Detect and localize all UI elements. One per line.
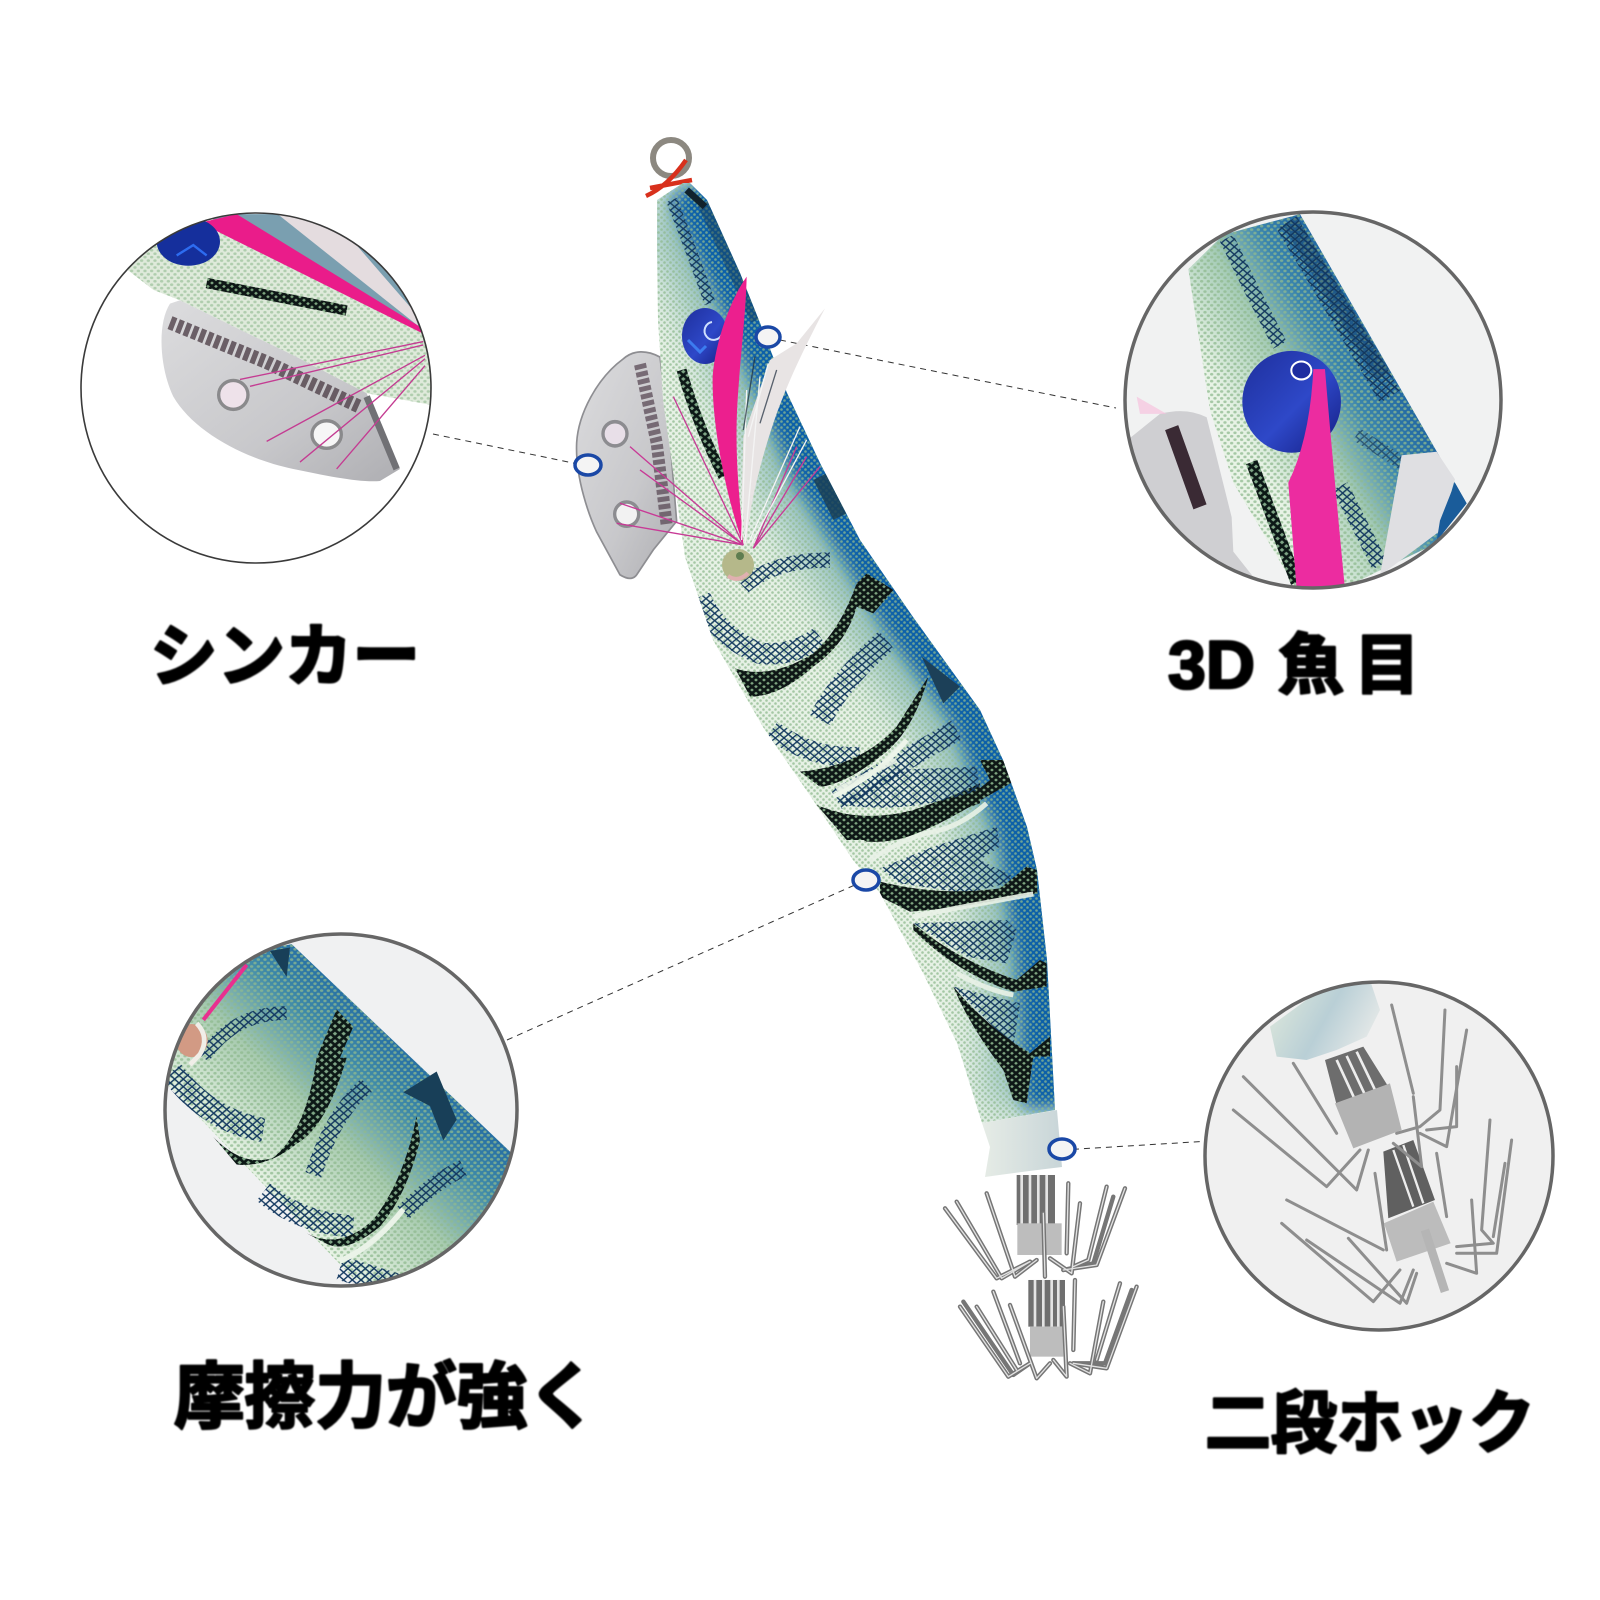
heading: strong friction: 摩擦力が強く — [174, 1358, 598, 1438]
panel: double hook detail — [1205, 980, 1553, 1330]
scale bands: rear body — [800, 760, 1050, 1103]
sinker weight — [577, 352, 677, 578]
panel: 3D eye detail — [1120, 212, 1501, 593]
marker dots — [575, 327, 1075, 1159]
upper hook tines — [945, 1183, 1125, 1278]
hook stems — [1017, 1175, 1065, 1357]
heading: 3D fish eye: 目 — [1354, 628, 1420, 702]
panel: sinker detail — [81, 211, 433, 563]
lure body fabric — [657, 183, 1055, 1123]
heading: 3D fish eye: 魚 — [1278, 628, 1344, 702]
bead — [722, 549, 754, 581]
heading: 3D fish eye: 3D — [1168, 627, 1255, 703]
3D eye — [682, 308, 728, 364]
leader lines — [433, 340, 1210, 1150]
scale bands: front body — [700, 560, 980, 840]
icon: towing eye ring — [646, 140, 692, 196]
main lure: squid jig — [577, 140, 1137, 1378]
lower hook tines — [960, 1280, 1137, 1378]
heading: double hook: 二段ホック — [1205, 1386, 1535, 1462]
feathers and threads — [617, 277, 825, 548]
heading: sinker: シンカー — [150, 619, 420, 695]
collar band — [982, 1110, 1062, 1177]
panel: friction fabric detail — [160, 934, 520, 1290]
head net stripes — [672, 190, 840, 517]
